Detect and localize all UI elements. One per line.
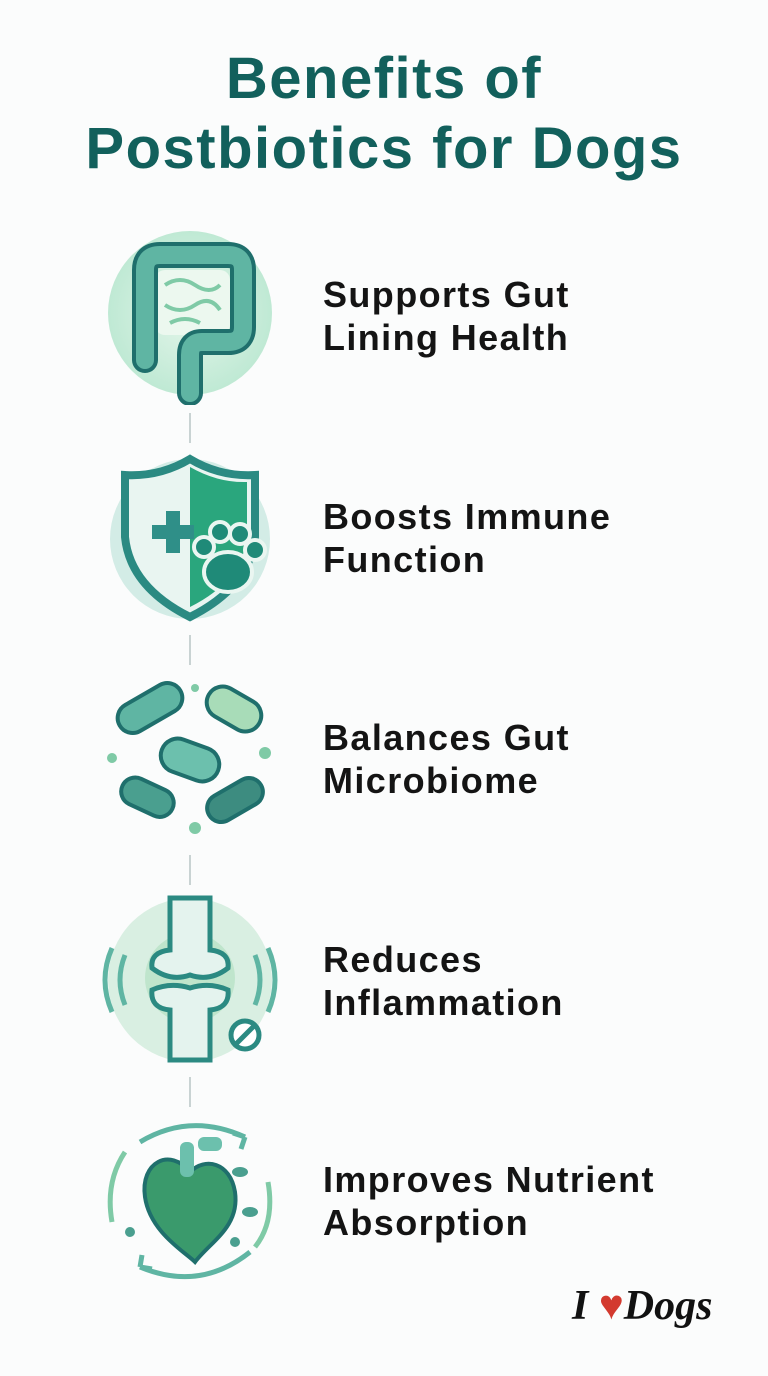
- label 1: [323, 274, 570, 358]
- label 5: [323, 1159, 655, 1243]
- icon: joint: [102, 896, 278, 1062]
- logo: I ♥Dogs: [572, 1283, 712, 1329]
- label 3: Balances Gut: [323, 717, 570, 758]
- label 4: Inflammation: [323, 982, 564, 1023]
- icon: intestine: [108, 231, 272, 405]
- label 3: [323, 717, 570, 801]
- label 4: [323, 939, 564, 1023]
- title: Postbiotics for Dogs: [85, 116, 683, 181]
- label 3: Microbiome: [323, 760, 539, 801]
- label 2: [323, 496, 611, 580]
- icon: microbiome: [107, 681, 271, 834]
- label 5: Improves Nutrient: [323, 1159, 655, 1200]
- title: [85, 46, 683, 181]
- label 1: Lining Health: [323, 317, 569, 358]
- label 4: Reduces: [323, 939, 483, 980]
- title: Benefits of: [226, 46, 542, 111]
- icon: heart absorption: [108, 1123, 272, 1280]
- icon: shield: [110, 454, 270, 622]
- label 2: Boosts Immune: [323, 496, 611, 537]
- label 5: Absorption: [323, 1202, 529, 1243]
- label 1: Supports Gut: [323, 274, 570, 315]
- label 2: Function: [323, 539, 486, 580]
